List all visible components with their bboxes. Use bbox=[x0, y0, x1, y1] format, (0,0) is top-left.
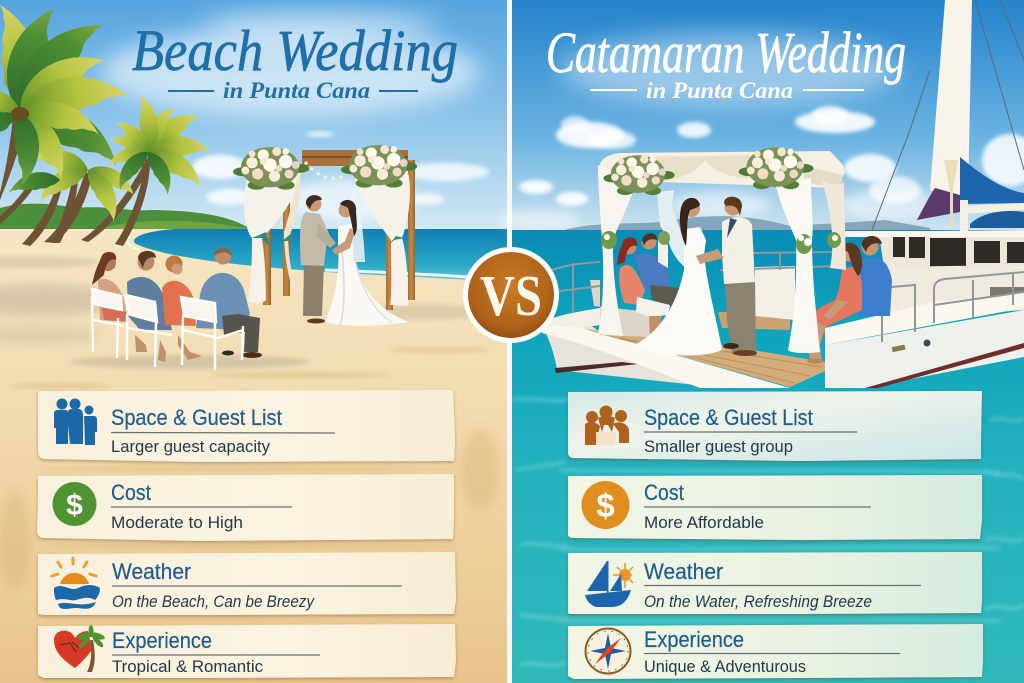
catamaran card 1: space and guest list: Smaller guest group bbox=[644, 437, 793, 456]
woman in coral bbox=[98, 279, 128, 322]
second palm crown bbox=[139, 102, 202, 157]
beach title: in Punta Cana bbox=[223, 78, 370, 103]
bench bbox=[590, 280, 650, 337]
beach sky bbox=[0, 0, 507, 232]
sand ripples bbox=[0, 347, 500, 590]
beach card 3: weather: On the Beach, Can be Breezy bbox=[112, 592, 315, 611]
beach sea bbox=[125, 229, 507, 289]
legs bbox=[135, 335, 202, 362]
white chairs bbox=[92, 289, 243, 370]
woman in orange bbox=[162, 281, 196, 326]
catamaran card 2: cost bbox=[568, 475, 982, 540]
catamaran card 2: cost: More Affordable bbox=[644, 513, 764, 532]
big palm crown bbox=[0, 0, 44, 113]
icon: sun over waves bbox=[52, 558, 100, 609]
beach card 4: experience bbox=[38, 624, 456, 678]
catamaran card 3: weather: On the Water, Refreshing Breeze bbox=[644, 592, 872, 611]
VS badge: VS bbox=[480, 263, 542, 328]
canopy bbox=[598, 147, 846, 353]
catamaran sky bbox=[512, 0, 1024, 232]
man in blue bbox=[634, 254, 669, 290]
heading and value: Space & Guest List bbox=[111, 405, 282, 430]
icon: three people bbox=[54, 398, 97, 445]
catamaran card 4: experience bbox=[568, 624, 983, 679]
icon: heart and palm bbox=[54, 625, 106, 672]
heading and value: Cost bbox=[111, 480, 151, 505]
ties bbox=[252, 232, 270, 247]
catamaran cabin bbox=[845, 230, 1024, 320]
icon: green dollar bbox=[52, 482, 96, 526]
catamaran clouds bbox=[500, 34, 1024, 230]
icon: sailboat and sun bbox=[585, 561, 633, 607]
man in blue right bbox=[858, 257, 892, 316]
icon: orange dollar: $ bbox=[596, 487, 615, 524]
catamaran card 3: weather bbox=[568, 552, 982, 614]
distant mountains bbox=[565, 216, 930, 231]
icon: group of guests bbox=[585, 406, 629, 445]
trunks bbox=[0, 118, 152, 246]
low palm bbox=[86, 160, 140, 197]
beach clouds bbox=[100, 9, 489, 220]
icon: green dollar: $ bbox=[66, 489, 83, 522]
man in blue bbox=[127, 277, 172, 330]
shoreline foam bbox=[128, 236, 140, 250]
heading and value: Weather bbox=[112, 559, 191, 584]
water streaks bbox=[512, 398, 1024, 665]
seated guests on boat bbox=[617, 233, 892, 364]
palm shadows on sand bbox=[0, 256, 490, 369]
catamaran title bbox=[546, 20, 906, 103]
palm trees bbox=[0, 0, 211, 246]
white divider bbox=[507, 0, 512, 683]
catamaran title: Catamaran Wedding bbox=[546, 20, 906, 85]
couple on boat bbox=[634, 197, 757, 356]
curtains bbox=[598, 165, 636, 336]
panel: catamaran wedding bbox=[500, 0, 1024, 683]
man in light blue bbox=[196, 273, 250, 330]
woman in coral right bbox=[810, 267, 862, 327]
catamaran card 4: experience: Unique & Adventurous bbox=[644, 657, 806, 676]
icon: compass bbox=[586, 628, 630, 674]
railings bbox=[552, 252, 1024, 342]
beach card 1: space and guest list: Larger guest capacity bbox=[111, 437, 270, 456]
sailboat rig bbox=[872, 0, 1024, 236]
catamaran card 1: space and guest list bbox=[568, 391, 982, 461]
woman in coral bbox=[619, 265, 645, 305]
icon: orange dollar bbox=[582, 481, 630, 529]
catamaran hull and deck bbox=[540, 252, 1024, 388]
beach card 3: weather bbox=[38, 552, 456, 615]
heading and value: Weather bbox=[644, 559, 723, 584]
beach title: Beach Wedding bbox=[132, 18, 458, 83]
catamaran title: in Punta Cana bbox=[646, 78, 793, 103]
catamaran sea bbox=[512, 230, 1024, 683]
beach card 2: cost: Moderate to High bbox=[111, 513, 243, 532]
heading and value: Cost bbox=[644, 480, 684, 505]
beach sand bbox=[0, 229, 507, 683]
panel: beach wedding bbox=[0, 0, 507, 683]
beach card 1: space and guest list bbox=[38, 390, 455, 462]
heading and value: Experience bbox=[112, 628, 212, 653]
wedding arch bbox=[233, 145, 417, 310]
heading and value: Experience bbox=[644, 627, 744, 652]
heading and value: Space & Guest List bbox=[644, 405, 813, 430]
VS badge bbox=[463, 247, 559, 343]
beach card 4: experience: Tropical & Romantic bbox=[112, 657, 263, 676]
drapes bbox=[244, 165, 302, 304]
beach card 2: cost bbox=[37, 474, 454, 541]
tree line bbox=[0, 204, 255, 229]
couple on beach bbox=[300, 193, 409, 326]
tie greens bbox=[601, 231, 617, 249]
seated guests bbox=[92, 248, 262, 370]
